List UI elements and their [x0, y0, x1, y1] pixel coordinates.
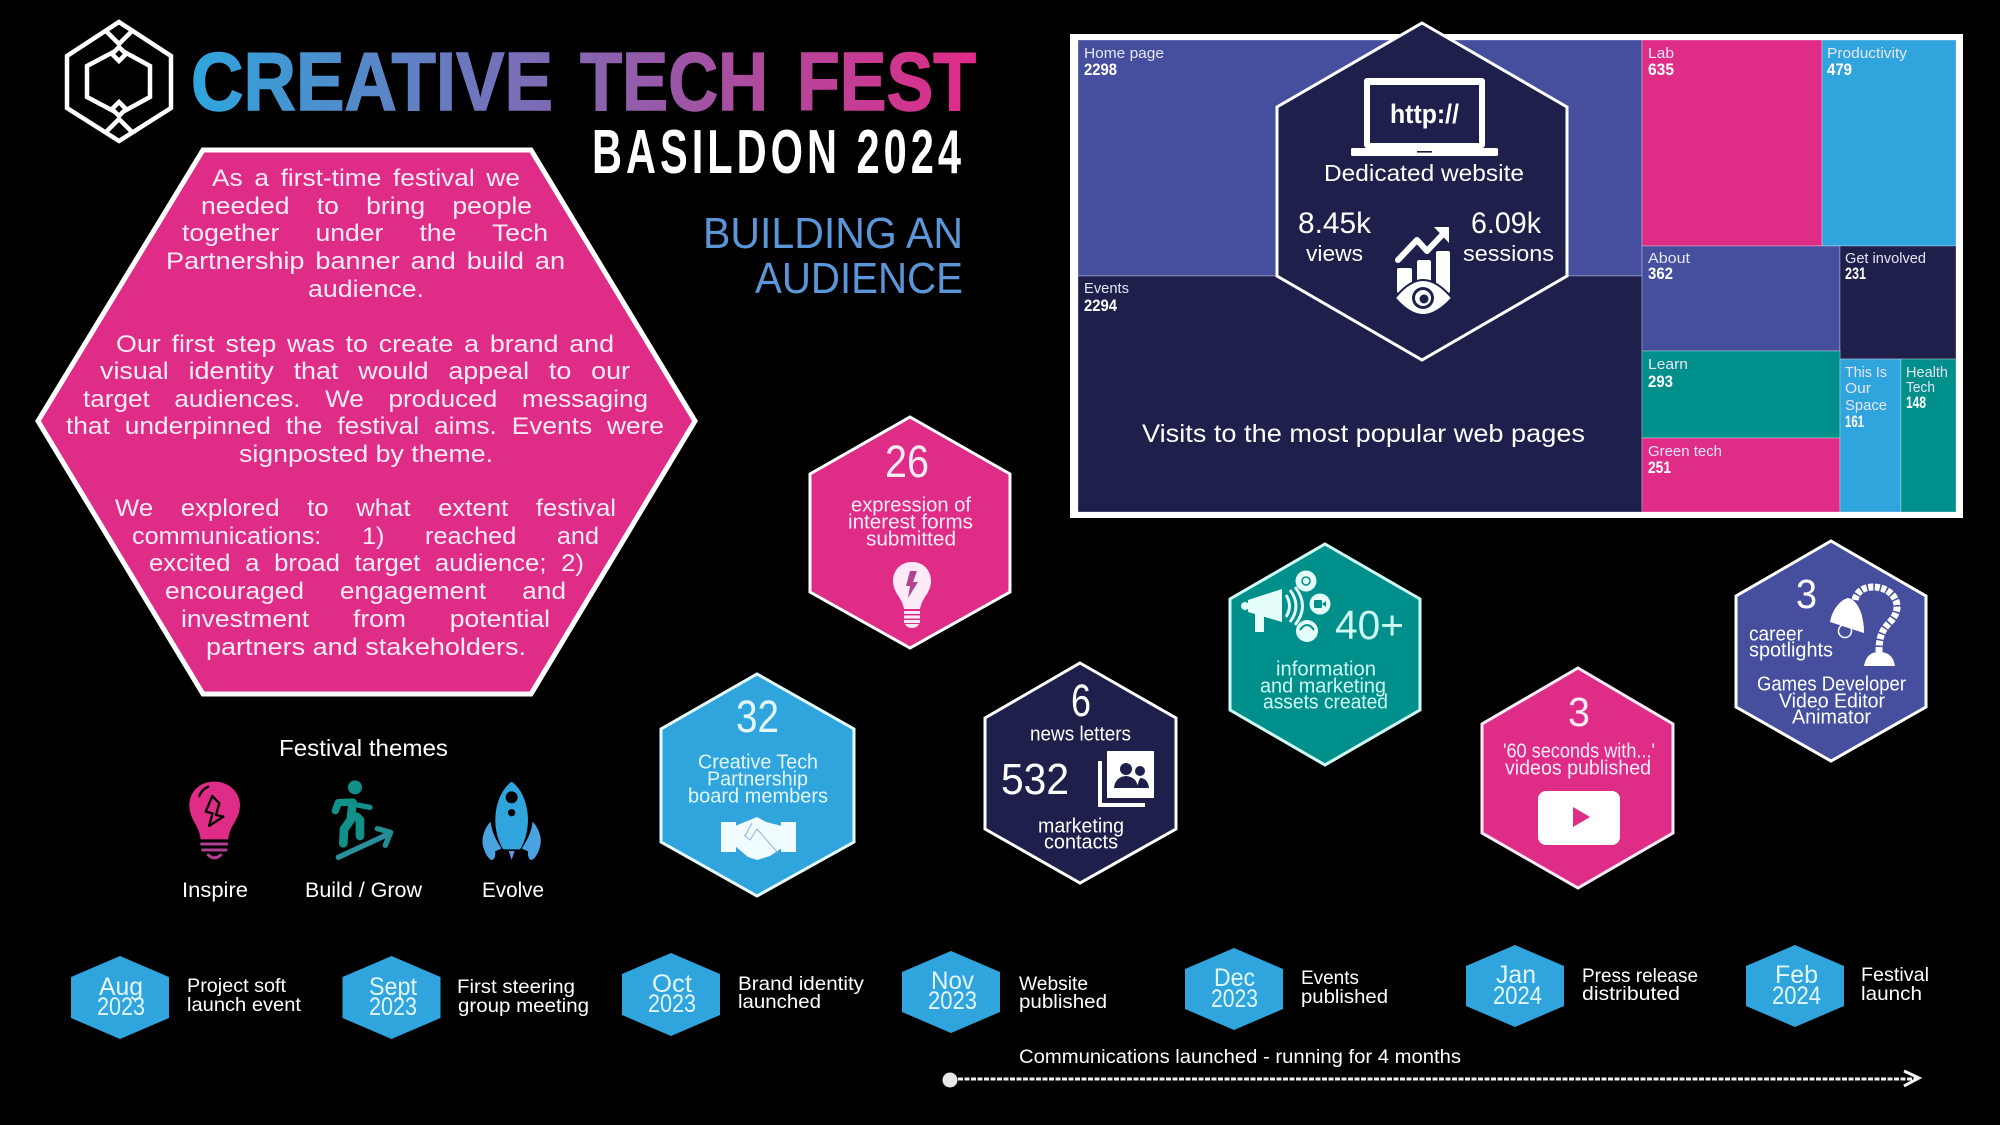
icon: laptop: http:// — [1390, 99, 1459, 129]
panel: website treemap: Productivity — [1827, 45, 1908, 62]
icon: megaphone with media circles — [1241, 570, 1330, 642]
panel: introduction hexagon: audience. — [308, 276, 424, 303]
timeline: November 2023 — [902, 951, 1107, 1033]
panel: festival themes — [182, 735, 544, 902]
timeline: September 2023: First steering — [457, 976, 575, 998]
hexagon: board members: board members — [688, 785, 828, 807]
panel: introduction hexagon: Our first step was to create a brand and — [116, 331, 614, 358]
hexagon: career spotlights: Games Developer — [1757, 673, 1906, 695]
hexagon: board members: 32 — [736, 691, 779, 742]
hexagon: videos published: videos published — [1505, 757, 1651, 779]
timeline: January 2024: Jan — [1496, 961, 1536, 989]
subtitle: location and year: BASILDON 2024 — [592, 118, 965, 187]
panel: introduction hexagon: visual identity that would appeal to our — [100, 358, 630, 385]
panel: website treemap: About — [1648, 250, 1691, 267]
panel: website treemap: 2298 — [1084, 60, 1117, 79]
hexagon: career spotlights — [1736, 541, 1926, 761]
hexagon: board members — [661, 674, 854, 896]
heading: building an audience: BUILDING AN — [703, 210, 963, 258]
panel: website treemap: Green tech — [1648, 443, 1722, 460]
timeline: November 2023: Website — [1019, 973, 1088, 995]
panel: website treemap: This Is — [1845, 364, 1887, 381]
timeline: November 2023: 2023 — [928, 987, 977, 1015]
hexagon: news letters and contacts: news letters — [1030, 723, 1131, 745]
hexagon: expression of interest forms: submitted — [866, 528, 956, 550]
hexagon: news letters and contacts: 532 — [1001, 755, 1069, 804]
timeline: February 2024: launch — [1861, 983, 1922, 1005]
timeline: January 2024: 2024 — [1493, 982, 1542, 1010]
panel: introduction hexagon: We explored to what extent festival — [115, 495, 616, 522]
icon: evolve rocket — [482, 782, 541, 860]
panel: website treemap: Home page — [1084, 45, 1164, 62]
panel: website treemap: 293 — [1648, 372, 1673, 391]
panel: website treemap: Get involved — [1845, 250, 1926, 267]
hexagon: career spotlights: spotlights — [1749, 639, 1833, 661]
panel: website treemap: 251 — [1648, 458, 1671, 477]
icon: laptop — [1351, 78, 1498, 156]
hexagon: expression of interest forms: expression of — [851, 494, 971, 516]
panel: introduction hexagon: partners and stakeholders. — [206, 634, 526, 661]
hexagon: board members: Partnership — [707, 768, 808, 790]
title: CREATIVE — [191, 35, 553, 128]
panel: introduction hexagon: signposted by theme. — [239, 441, 493, 468]
panel: website treemap: Space — [1845, 397, 1887, 414]
hexagon: board members: Creative Tech — [698, 751, 818, 773]
hexagon: marketing assets: and marketing — [1260, 675, 1386, 697]
panel: website treemap: Tech — [1906, 379, 1935, 396]
timeline: December 2023: Events — [1301, 967, 1359, 989]
panel: introduction hexagon: encouraged engagement and — [165, 578, 566, 605]
timeline: December 2023: Dec — [1214, 964, 1255, 992]
panel: dedicated website hexagon: Dedicated website — [1324, 160, 1524, 186]
timeline: September 2023: group meeting — [458, 995, 589, 1017]
hexagon: career spotlights: career — [1749, 623, 1803, 645]
panel: introduction hexagon: excited a broad target audience; 2) — [149, 550, 584, 577]
timeline: October 2023 — [622, 953, 864, 1036]
hexagon: marketing assets: assets created — [1263, 691, 1388, 713]
heading: building an audience — [703, 210, 963, 303]
timeline: February 2024: 2024 — [1772, 982, 1821, 1010]
hexagon: news letters and contacts — [985, 663, 1176, 883]
hexagon: videos published: '60 seconds with...' — [1503, 740, 1655, 762]
logo — [67, 22, 171, 141]
hexagon: expression of interest forms: 26 — [885, 436, 929, 487]
icon: build and grow — [335, 780, 391, 857]
timeline: October 2023: Brand identity — [738, 973, 864, 995]
timeline: February 2024 — [1746, 945, 1929, 1027]
icon: growth chart and eye — [1395, 227, 1452, 315]
timeline: October 2023: Oct — [652, 970, 692, 998]
timeline: December 2023: published — [1301, 986, 1388, 1008]
timeline: November 2023: Nov — [931, 967, 974, 995]
timeline: October 2023: 2023 — [648, 990, 696, 1018]
hexagon: marketing assets: 40+ — [1335, 602, 1404, 648]
panel: introduction hexagon: investment from potential — [181, 606, 550, 633]
icon: handshake — [721, 817, 796, 860]
title — [191, 35, 976, 128]
timeline: February 2024: Feb — [1775, 961, 1818, 989]
timeline: August 2023: 2023 — [97, 993, 145, 1021]
panel: website treemap: 148 — [1906, 393, 1926, 412]
icon: play button — [1538, 791, 1620, 845]
timeline: December 2023: 2023 — [1211, 985, 1258, 1013]
hexagon: news letters and contacts: 6 — [1071, 675, 1091, 726]
icon: desk lamp — [1830, 587, 1897, 666]
panel: dedicated website hexagon: sessions — [1463, 241, 1554, 266]
panel: website treemap: Visits to the most popular web pages — [1142, 420, 1585, 448]
panel: introduction hexagon: Partnership banner and build an — [166, 248, 565, 275]
caption: communications launched: Communications launched - running for 4 months — [1019, 1046, 1461, 1068]
arrow: communications duration — [942, 1071, 1919, 1088]
timeline: August 2023: Aug — [99, 973, 143, 1001]
timeline: September 2023: 2023 — [369, 993, 417, 1021]
panel: dedicated website hexagon: 8.45k — [1298, 207, 1372, 240]
panel: introduction hexagon — [38, 150, 695, 694]
timeline: January 2024: distributed — [1582, 983, 1680, 1005]
panel: introduction hexagon: needed to bring people — [201, 193, 532, 220]
panel: introduction hexagon: together under the Tech — [182, 220, 548, 247]
panel: website treemap: Events — [1084, 280, 1129, 297]
panel: website treemap: Learn — [1648, 356, 1688, 373]
timeline: December 2023 — [1185, 948, 1388, 1030]
timeline: January 2024: Press release — [1582, 965, 1698, 987]
panel: website treemap: 635 — [1648, 60, 1674, 79]
hexagon: expression of interest forms: interest forms — [848, 511, 973, 533]
panel: introduction hexagon: As a first-time festival we — [212, 165, 520, 192]
icon: light bulb — [893, 562, 931, 628]
panel: website treemap: Our — [1845, 380, 1871, 397]
panel: festival themes: Festival themes — [279, 735, 448, 761]
icon: contacts — [1100, 751, 1154, 805]
title: FEST — [797, 35, 976, 128]
panel: website treemap: Lab — [1648, 45, 1674, 62]
panel: website treemap: 161 — [1845, 412, 1864, 431]
title: TECH — [580, 35, 768, 128]
timeline: September 2023: Sept — [369, 973, 417, 1001]
panel: website treemap: 362 — [1648, 264, 1673, 283]
timeline: August 2023: launch event — [187, 994, 302, 1016]
heading: building an audience: AUDIENCE — [755, 255, 963, 303]
panel: introduction hexagon: that underpinned the festival aims. Events were — [66, 413, 664, 440]
timeline: February 2024: Festival — [1861, 964, 1929, 986]
hexagon: career spotlights: Animator — [1792, 706, 1871, 728]
panel: dedicated website hexagon: 6.09k — [1471, 207, 1542, 240]
panel: website treemap: 479 — [1827, 60, 1852, 79]
timeline: September 2023 — [342, 956, 589, 1039]
timeline: August 2023: Project soft — [187, 975, 287, 997]
panel: introduction hexagon: target audiences. We produced messaging — [83, 386, 648, 413]
icon: inspire bulb — [189, 782, 240, 858]
hexagon: expression of interest forms — [810, 417, 1010, 648]
hexagon: career spotlights: Video Editor — [1779, 690, 1885, 712]
panel: dedicated website hexagon — [1277, 23, 1567, 360]
timeline: November 2023: published — [1019, 991, 1107, 1013]
panel: introduction hexagon: communications: 1) reached and — [132, 523, 599, 550]
panel: festival themes: Evolve — [482, 879, 544, 902]
panel: website treemap: 231 — [1845, 264, 1866, 283]
hexagon: marketing assets — [1230, 544, 1420, 765]
hexagon: career spotlights: 3 — [1796, 571, 1817, 617]
hexagon: videos published: 3 — [1568, 689, 1590, 735]
panel: dedicated website hexagon: views — [1306, 241, 1363, 266]
hexagon: marketing assets: information — [1276, 658, 1376, 680]
timeline: October 2023: launched — [738, 991, 821, 1013]
hexagon: news letters and contacts: marketing — [1038, 815, 1124, 837]
timeline: August 2023 — [71, 956, 302, 1039]
panel: website treemap — [1070, 34, 1963, 518]
panel: festival themes: Inspire — [182, 879, 248, 902]
panel: website treemap: Health — [1906, 364, 1948, 381]
panel: festival themes: Build / Grow — [305, 879, 423, 902]
panel: website treemap: 2294 — [1084, 296, 1117, 315]
hexagon: videos published — [1482, 668, 1673, 888]
hexagon: news letters and contacts: contacts — [1044, 831, 1118, 853]
timeline: January 2024 — [1466, 945, 1698, 1027]
